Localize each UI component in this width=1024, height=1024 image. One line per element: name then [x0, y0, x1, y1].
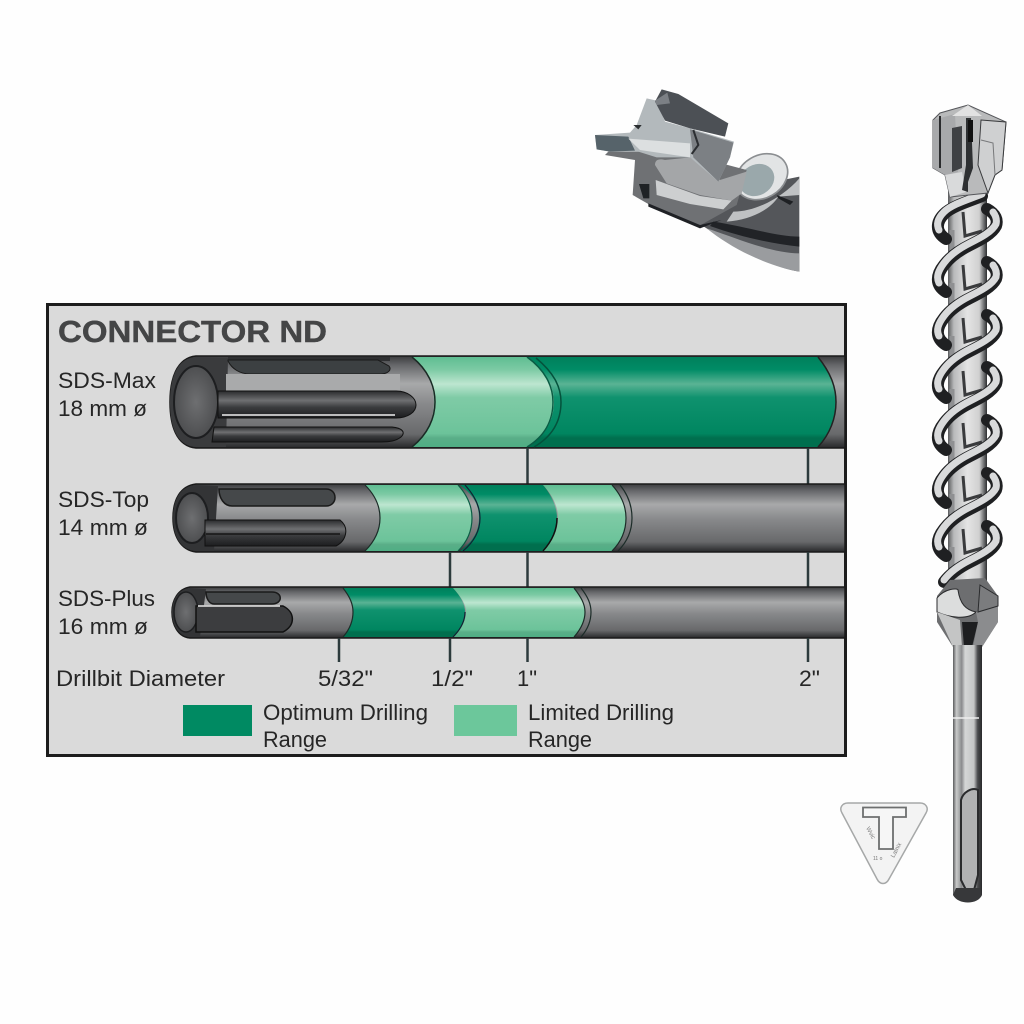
- illustration: full drill bit: [933, 105, 1006, 902]
- light limited segment: [453, 588, 585, 637]
- ticks: upper: [528, 448, 808, 484]
- axis value: 5/32: 5/32": [318, 666, 373, 691]
- flute marks: [952, 212, 982, 567]
- shank slot: [961, 789, 978, 890]
- panel: connector chart: [48, 304, 846, 756]
- axis value: 1: 1": [517, 666, 537, 691]
- title: CONNECTOR ND: [58, 315, 327, 349]
- logo microtext: Wvic: [864, 826, 876, 840]
- bar: SDS-Plus: [172, 587, 845, 638]
- shank ring: [953, 717, 979, 719]
- legend: optimum: [183, 700, 428, 752]
- label: SDS-Top: SDS-Top: [58, 487, 149, 512]
- dark optimum segment: [528, 357, 836, 447]
- ticks: axis: [339, 638, 808, 662]
- logo: T triangle: 11 o: [873, 856, 883, 862]
- label: SDS-Top: [58, 487, 149, 540]
- axis value: 1/2: 1/2": [431, 666, 473, 691]
- dark optimum segment: [343, 588, 465, 637]
- axis label: Drillbit Diameter: [56, 666, 226, 691]
- label: SDS-Plus: 16 mm ø: [58, 614, 148, 639]
- T mark: [863, 808, 906, 849]
- bar: SDS-Top: [173, 484, 845, 552]
- legend: optimum: Optimum Drilling: [263, 700, 428, 725]
- light limited segment: [412, 357, 554, 447]
- dark optimum segment: [460, 485, 557, 551]
- label: SDS-Max: [58, 368, 157, 421]
- logo: T triangle: [841, 803, 927, 884]
- bar: SDS-Max: [170, 356, 845, 448]
- head: [933, 105, 1006, 197]
- shank detail: [412, 357, 435, 447]
- shank: [953, 645, 982, 900]
- label: SDS-Max: 18 mm ø: [58, 396, 147, 421]
- light limited segment right: [543, 485, 626, 551]
- ticks: middle: [450, 552, 808, 587]
- axis value: 2: 2": [799, 666, 820, 691]
- label: SDS-Max: SDS-Max: [58, 368, 157, 393]
- shank detail: [172, 588, 206, 637]
- legend: limited: Range: [528, 727, 592, 752]
- illustration: drill tip close-up: [595, 89, 799, 272]
- shaft: [948, 185, 987, 600]
- helix flights: [938, 194, 997, 582]
- collar: [937, 578, 998, 647]
- logo: T triangle: Latnix: [890, 842, 903, 859]
- light limited segment left: [365, 485, 472, 551]
- legend: limited: [454, 700, 674, 752]
- label: SDS-Plus: SDS-Plus: [58, 586, 155, 611]
- legend: limited: Limited Drilling: [528, 700, 674, 725]
- label: SDS-Plus: [58, 586, 155, 639]
- shank detail: [173, 485, 218, 551]
- label: SDS-Top: 14 mm ø: [58, 515, 148, 540]
- shank tip: [953, 888, 982, 902]
- legend: optimum: Range: [263, 727, 327, 752]
